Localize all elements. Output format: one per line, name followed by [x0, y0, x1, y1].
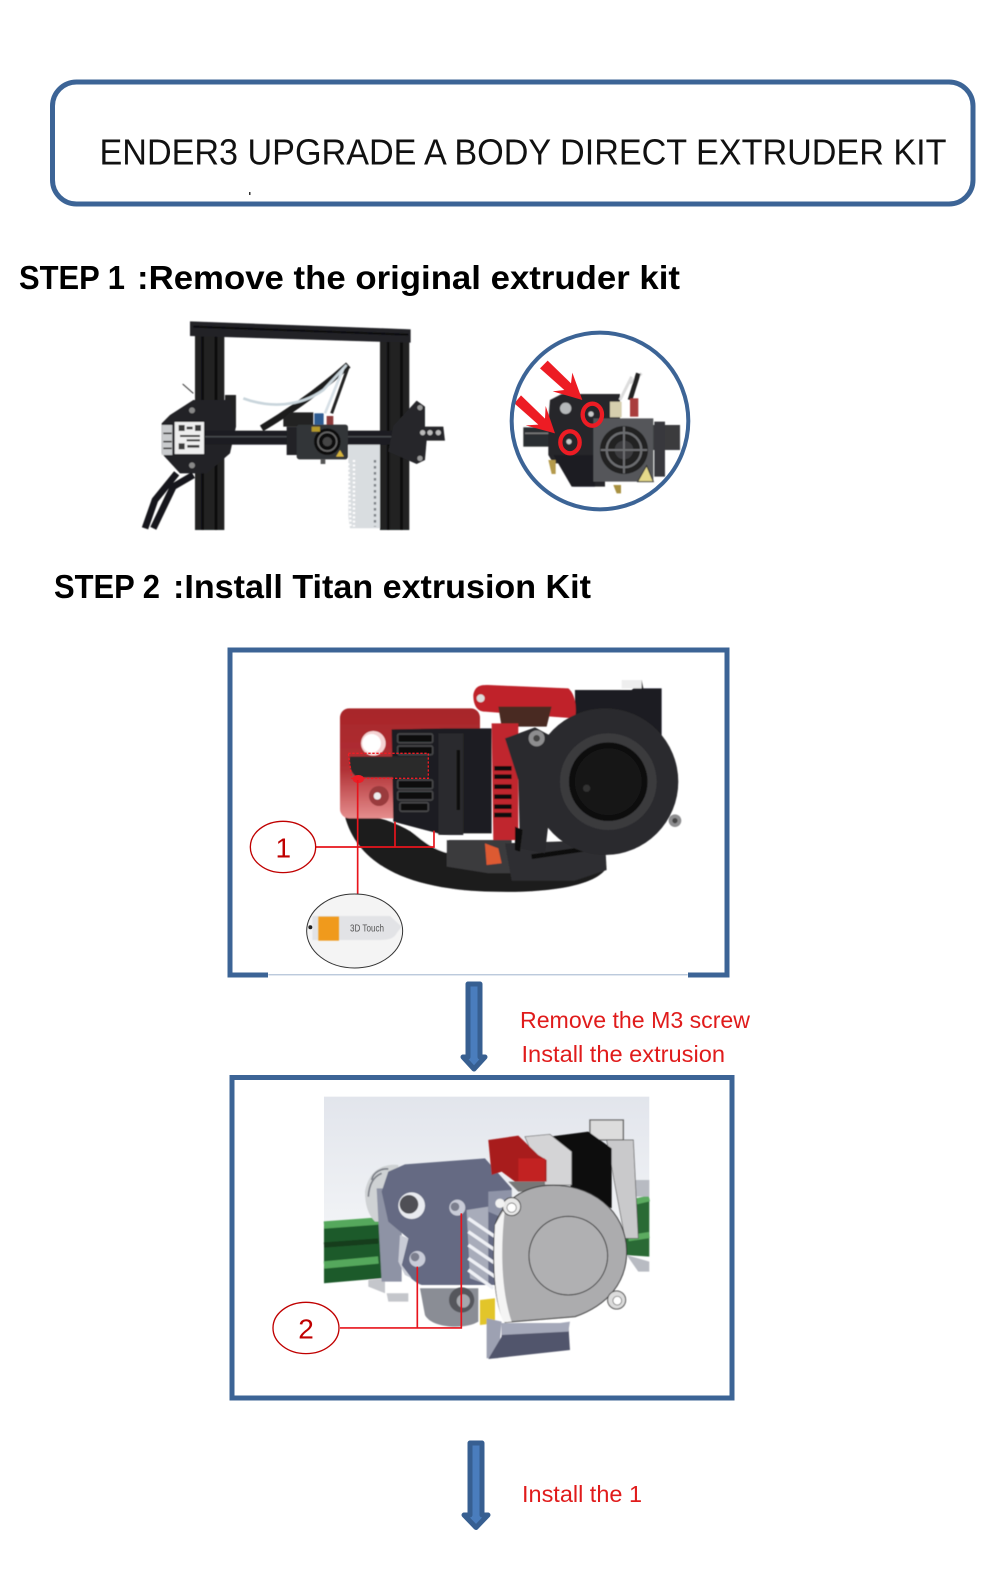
- panel frame 1: [230, 650, 727, 975]
- panel: CAD model of extruder: [232, 1078, 732, 1398]
- detail circle: screws to remove: [512, 333, 688, 509]
- heading: step 2: :Install Titan extrusion Kit: [173, 568, 591, 605]
- callout 2: [273, 1302, 339, 1354]
- note: remove screw and install extrusion: Install the extrusion: [522, 1041, 725, 1067]
- note: remove screw and install extrusion: [520, 1007, 750, 1067]
- callout 1: [250, 821, 316, 873]
- inset: 3D Touch probe: [307, 894, 403, 968]
- image: CAD render with mounting holes: [273, 1097, 649, 1380]
- heading: step 1: :Remove the original extruder kit: [137, 259, 680, 296]
- panel: assembled extruder with 3D Touch: [230, 650, 727, 975]
- note: remove screw and install extrusion: Remove the M3 screw: [520, 1007, 750, 1033]
- title box: ENDER3 UPGRADE A BODY DIRECT EXTRUDER KIT: [100, 132, 946, 172]
- callout 1: 1: [276, 833, 291, 864]
- photo: red extruder kit: [250, 680, 688, 975]
- inset: 3D Touch probe: 3D Touch: [350, 924, 384, 935]
- note: install part 1: Install the 1: [522, 1481, 642, 1507]
- arrow: down to step 2: [463, 984, 485, 1069]
- heading: step 1: STEP 1: [19, 259, 125, 296]
- title box: [52, 82, 973, 204]
- panel frame 2: [232, 1078, 732, 1398]
- heading: step 2: STEP 2: [54, 568, 160, 605]
- callout 2: 2: [298, 1314, 314, 1345]
- arrow: down to next step: [464, 1443, 488, 1528]
- photo: Ender 3 printer frame: [145, 321, 445, 530]
